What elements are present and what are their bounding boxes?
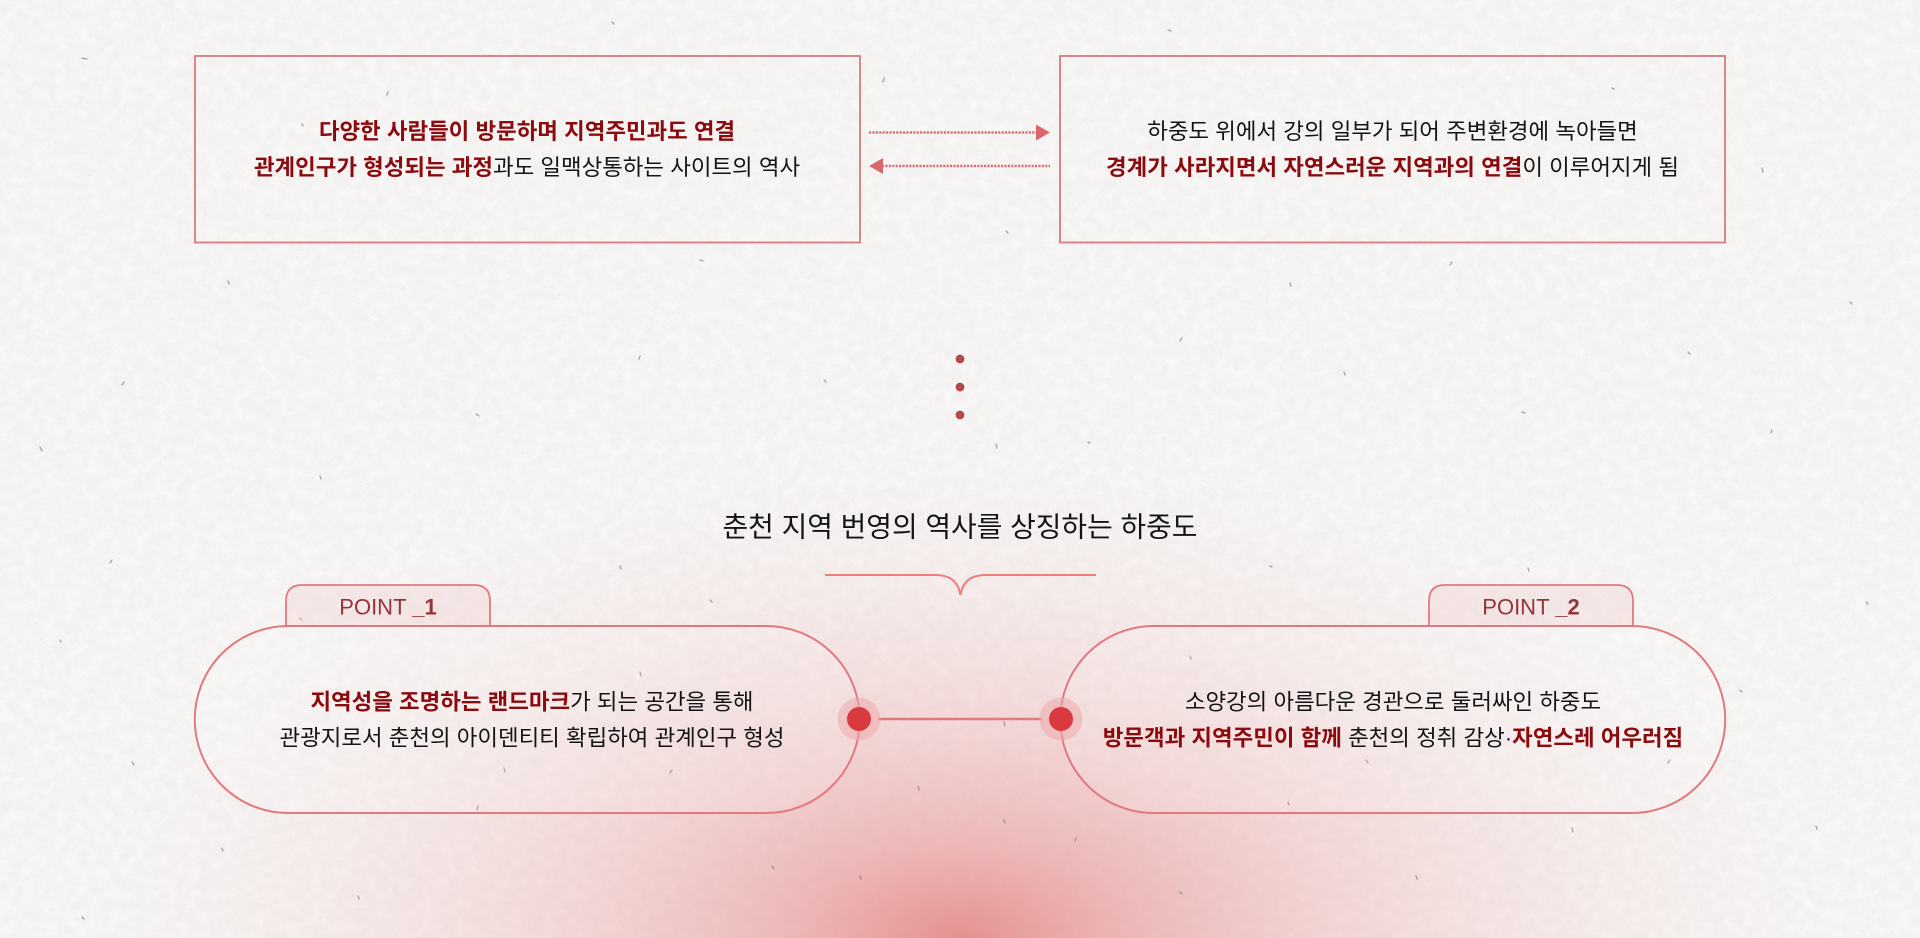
tab: point 2: POINT _2 [1482,594,1580,620]
text block: point 1: 지역성을 조명하는 랜드마크가 되는 공간을 통해 [310,690,754,714]
arrow: pointing left [869,158,1050,174]
icon: left node [838,698,880,740]
text block: point 2 [1103,690,1683,750]
arrow: pointing right [869,124,1050,140]
panel: site history box [195,56,860,242]
text block: site history [254,119,800,180]
icon: right node [1040,698,1082,740]
icon: brace [825,575,1096,595]
heading: 춘천 지역 번영의 역사를 상징하는 하중도 [723,512,1197,542]
text block: point 2: 방문객과 지역주민이 함께 춘천의 정취 감상·자연스레 어우러짐 [1103,726,1683,750]
panel: river island box [1060,56,1725,242]
tab: point 2 [1429,585,1633,626]
panel: point 1 [195,585,860,813]
text block: river island [1106,119,1679,180]
icon: vertical three dots [956,355,964,419]
text block: site history: 관계인구가 형성되는 과정과도 일맥상통하는 사이트의 역사 [254,155,800,180]
tab: point 1 [286,585,490,626]
text block: point 1 [280,690,784,750]
text block: river island: 경계가 사라지면서 자연스러운 지역과의 연결이 이루어지게 됨 [1106,155,1679,180]
text block: site history: 다양한 사람들이 방문하며 지역주민과도 연결 [319,119,735,144]
text block: point 2: 소양강의 아름다운 경관으로 둘러싸인 하중도 [1185,690,1601,714]
tab: point 1: POINT _1 [339,594,437,620]
text block: point 1: 관광지로서 춘천의 아이덴티티 확립하여 관계인구 형성 [280,726,784,750]
text block: river island: 하중도 위에서 강의 일부가 되어 주변환경에 녹아들면 [1147,119,1638,144]
panel: point 2 [1060,585,1725,813]
connector: line between points [878,718,1042,720]
